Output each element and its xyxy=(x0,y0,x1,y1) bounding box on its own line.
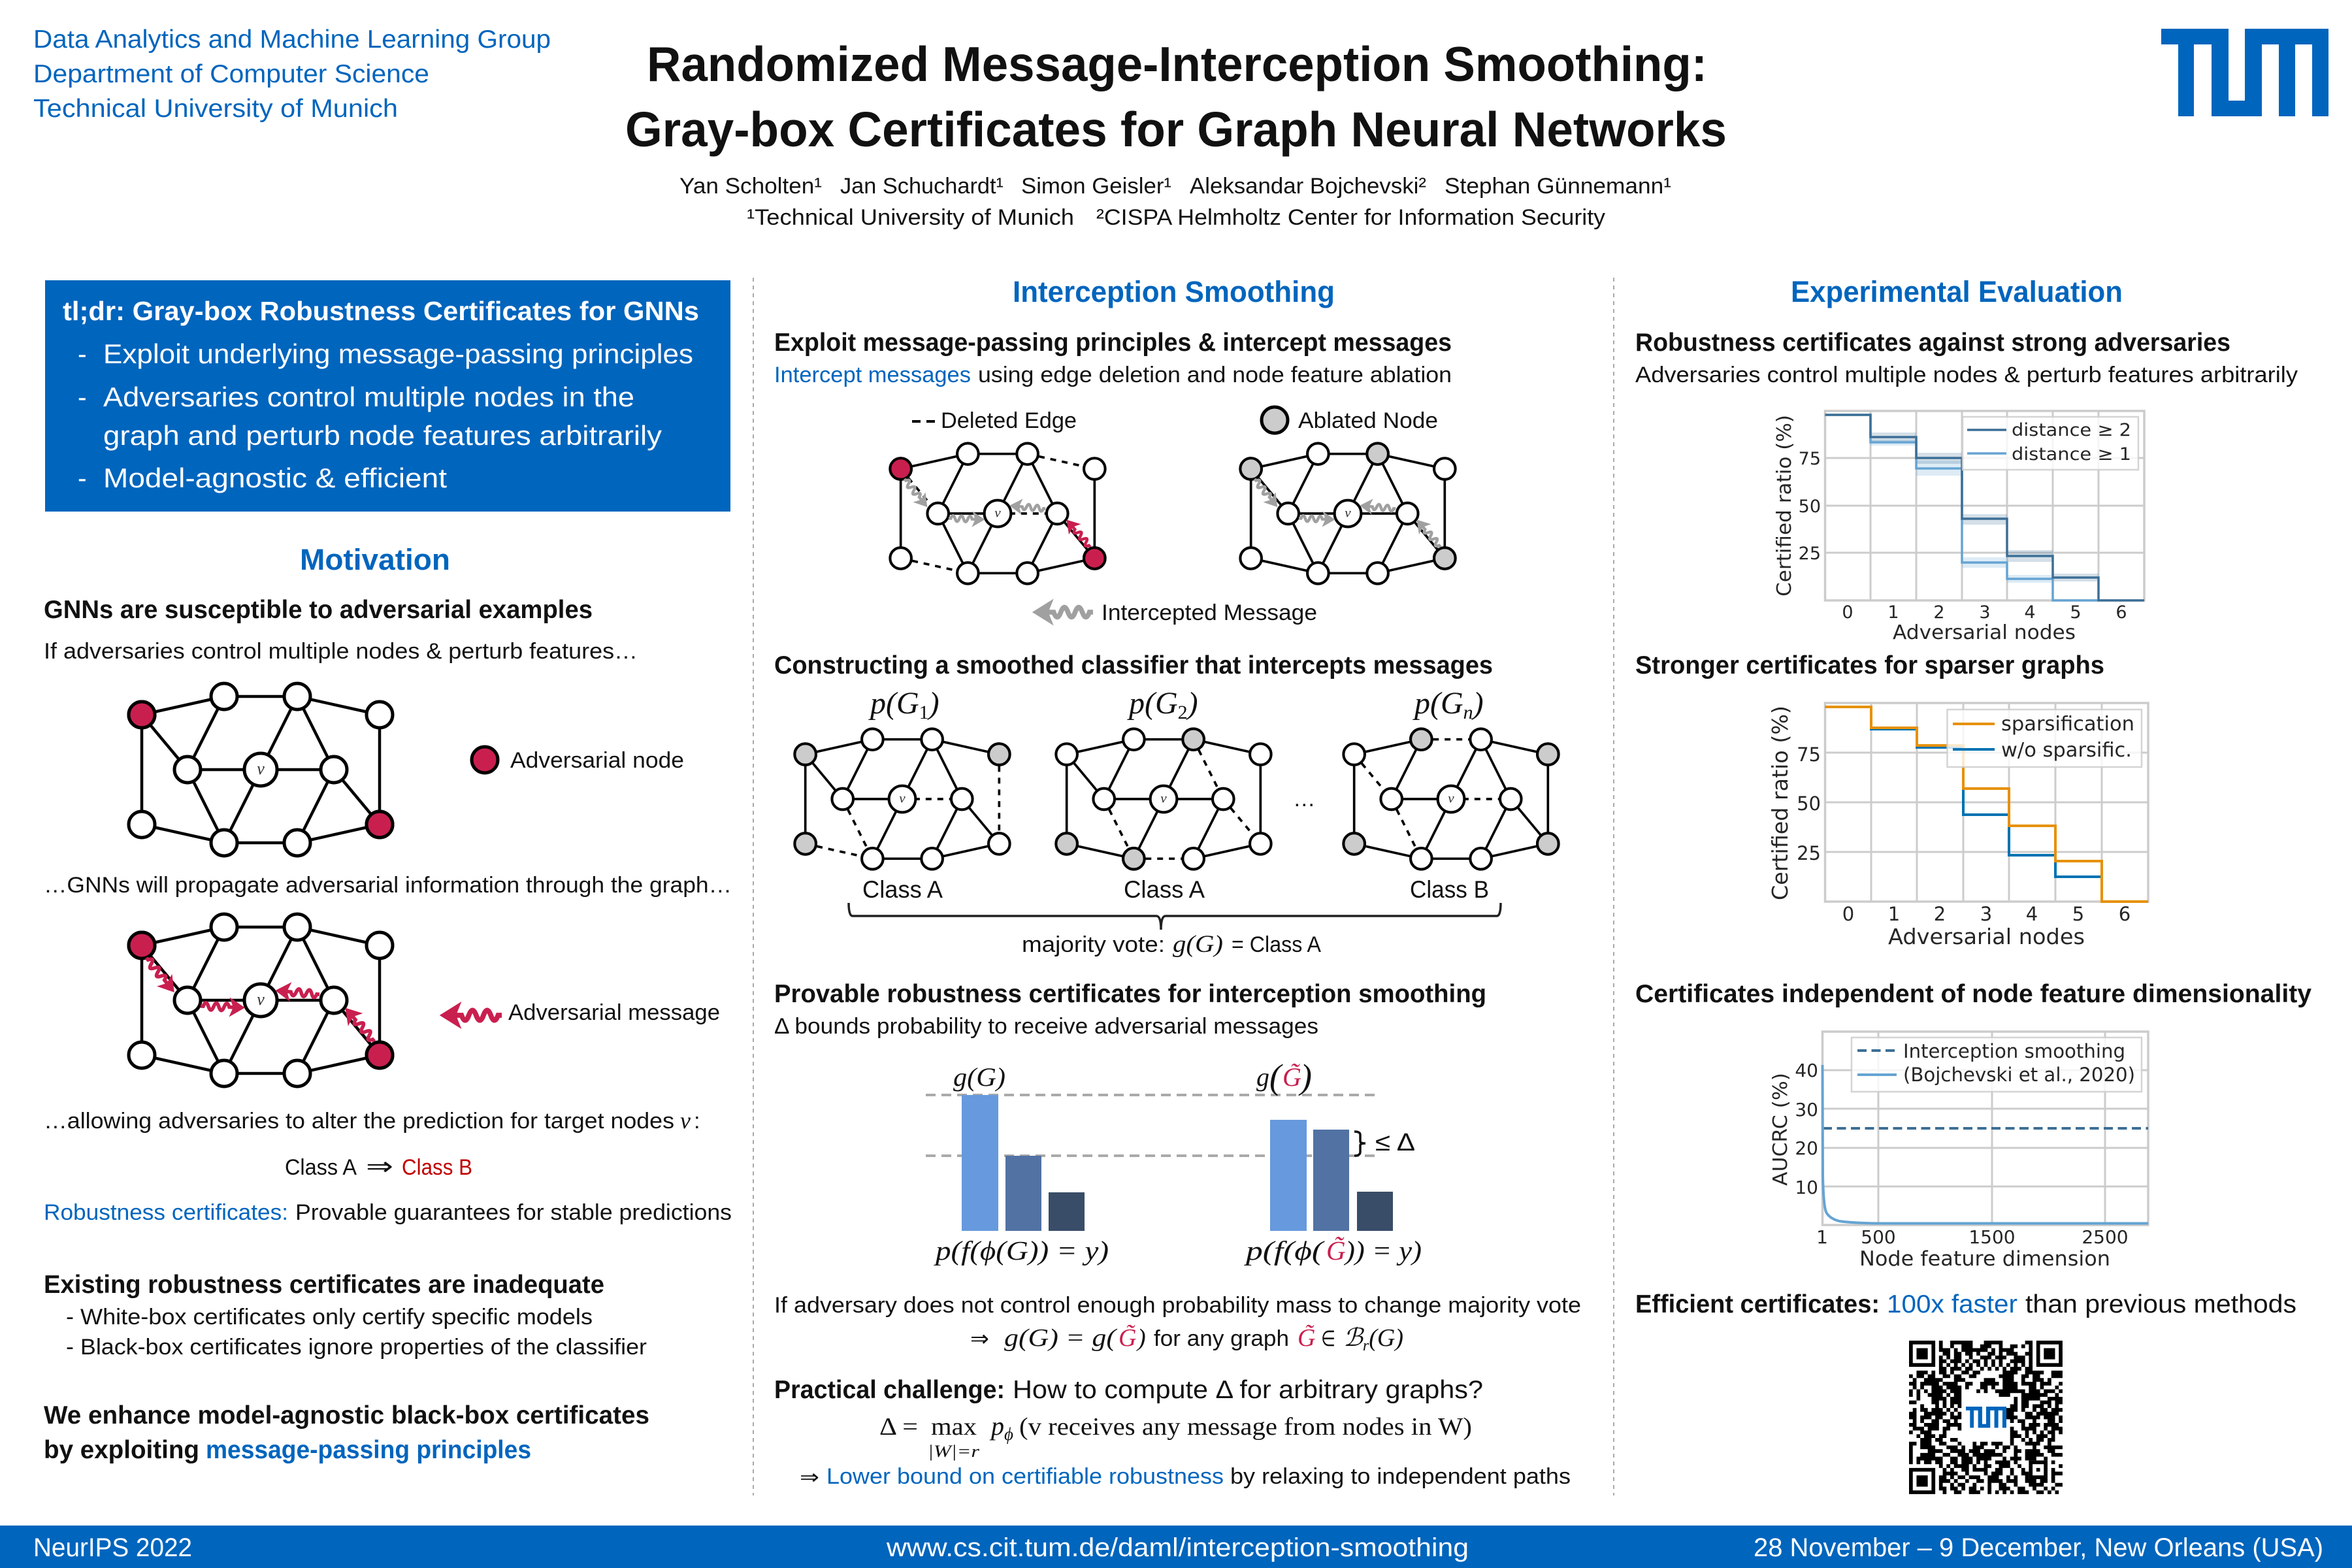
text: efficient certificates: Efficient certificates: xyxy=(1635,1290,1880,1318)
legend: adversarial message xyxy=(440,1000,720,1029)
panel: motivation xyxy=(44,543,732,1464)
chart: AUCRC by feature dimension: 40 xyxy=(1795,1060,1818,1081)
subheading: adversarial examples: GNNs are susceptible to adversarial examples xyxy=(44,596,593,624)
conclusion: enhance black-box certificates: We enhance model-agnostic black-box certificates xyxy=(44,1401,649,1429)
legend: deleted edge: Deleted Edge xyxy=(941,408,1077,433)
chart: class probability bars xyxy=(926,1057,1422,1266)
formula: delta: (v receives any message from nodes in W) xyxy=(1019,1413,1472,1441)
chart: certified ratio by distance: 4 xyxy=(2024,602,2036,623)
text: GNNs propagate: …GNNs will propagate adversarial information through the graph… xyxy=(44,873,732,898)
header: affiliation: Department of Computer Science xyxy=(33,60,429,88)
text: robustness certificates: Robustness certificates: xyxy=(44,1200,288,1225)
chart: certified ratio by distance: distance ≥ 1 xyxy=(2012,444,2131,465)
text: efficient certificates xyxy=(1635,1290,2296,1318)
label: p(Gn): n xyxy=(1463,702,1473,723)
text: alter prediction: v xyxy=(680,1107,691,1134)
formula: invariance: ℬ xyxy=(1343,1324,1363,1352)
heading: motivation: Motivation xyxy=(300,543,450,576)
formula: delta: max xyxy=(931,1413,977,1441)
chart: AUCRC by feature dimension: (Bojchevski et al., 2020) xyxy=(1903,1064,2135,1086)
label: g(G tilde): g xyxy=(1256,1062,1269,1092)
label: p(f(phi(G tilde)))=y: p(f(ϕ( xyxy=(1243,1235,1325,1266)
text: majority vote: = Class A xyxy=(1232,932,1321,957)
graph: adversarial messages: v xyxy=(257,990,265,1009)
ellipsis: … xyxy=(1293,787,1316,811)
authors: Yan Scholten¹ xyxy=(679,174,822,199)
chart: AUCRC by feature dimension: 2500 xyxy=(2082,1226,2129,1248)
header: affiliation xyxy=(33,25,551,123)
chart: certified ratio with sparsification xyxy=(1767,703,2148,949)
panel: tl;dr: tl;dr: Gray-box Robustness Certificates for GNNs xyxy=(63,296,699,326)
label: g(G): g(G) xyxy=(953,1062,1005,1092)
conclusion: enhance black-box certificates xyxy=(44,1401,649,1464)
text: class change: Class A xyxy=(285,1155,357,1180)
panel: tl;dr: graph and perturb node features arbitrarily xyxy=(103,420,662,451)
formula: invariance: ⇒ xyxy=(970,1326,989,1351)
labels: class predictions: Class B xyxy=(1410,876,1489,903)
graph: node ablation: v xyxy=(1345,505,1351,521)
chart: certified ratio with sparsification: 3 xyxy=(1980,903,1992,925)
chart: certified ratio by distance xyxy=(1773,411,2144,644)
formula: invariance: r xyxy=(1363,1337,1369,1354)
text: practical challenge: Practical challenge: xyxy=(774,1376,1005,1404)
label: p(Gn): p(G xyxy=(1414,686,1463,721)
formula: delta: ϕ xyxy=(1004,1424,1013,1444)
chart: certified ratio by distance: 3 xyxy=(1979,602,1991,623)
panel: experimental evaluation xyxy=(1635,275,2311,1494)
label: p(G1): 1 xyxy=(919,702,929,723)
formula: invariance: for any graph xyxy=(1154,1326,1289,1351)
chart: AUCRC by feature dimension: 20 xyxy=(1795,1137,1818,1159)
label: g(G tilde): ) xyxy=(1298,1057,1312,1096)
formula: invariance: G̃ xyxy=(1298,1324,1315,1352)
chart: certified ratio with sparsification: Adversarial nodes xyxy=(1888,924,2085,949)
legend: intercepted message xyxy=(1032,598,1317,626)
list: inadequate certificates: - White-box certificates only certify specific models xyxy=(66,1305,593,1330)
conclusion: enhance black-box certificates: by exploiting xyxy=(44,1436,199,1464)
formula: invariance: g(G) = g( xyxy=(1004,1324,1118,1352)
authors: Stephan Günnemann¹ xyxy=(1445,174,1671,199)
graph: adversarial messages xyxy=(129,914,393,1086)
chart: AUCRC by feature dimension: 1500 xyxy=(1968,1226,2016,1248)
chart: AUCRC by feature dimension: 10 xyxy=(1795,1177,1818,1198)
formula: invariance: ∈ xyxy=(1321,1326,1335,1351)
formula: delta: p xyxy=(991,1411,1004,1441)
chart: AUCRC by feature dimension: Node feature dimension xyxy=(1859,1247,2110,1271)
formula: invariance: G̃ xyxy=(1119,1324,1136,1352)
chart: certified ratio with sparsification: sparsification xyxy=(2001,713,2134,736)
panel: tl;dr: Adversaries control multiple nodes in the xyxy=(103,382,634,412)
legend: ablated node: Ablated Node xyxy=(1298,408,1438,433)
chart: certified ratio with sparsification: 6 xyxy=(2119,903,2131,925)
chart: certified ratio by distance: 1 xyxy=(1887,602,1899,623)
text: intercept messages xyxy=(774,363,1452,387)
graph: sample 1 xyxy=(794,728,1010,870)
panel: tl;dr: - xyxy=(78,382,87,412)
subheading: feature dimensionality: Certificates independent of node feature dimensionality xyxy=(1635,980,2311,1008)
list: inadequate certificates xyxy=(66,1305,647,1360)
graph: edge deletion xyxy=(890,443,1105,584)
graph: edge deletion: v xyxy=(994,505,1001,521)
text: majority vote: g(G) xyxy=(1173,931,1223,958)
formula: delta xyxy=(879,1411,1472,1461)
footer bar xyxy=(0,1526,2352,1568)
text: class change: Class B xyxy=(402,1155,472,1180)
brace: delta xyxy=(1354,1132,1365,1156)
chart: certified ratio by distance: distance ≥ 2 xyxy=(2012,420,2131,440)
subheading: exploit message passing: Exploit message-passing principles & intercept messages xyxy=(774,329,1452,357)
graph: sample n xyxy=(1343,728,1559,870)
list: inadequate certificates: - Black-box certificates ignore properties of the classifier xyxy=(66,1335,647,1360)
chart: AUCRC by feature dimension: 30 xyxy=(1795,1099,1818,1120)
text: probability mass: If adversary does not control enough probability mass to change majority vote xyxy=(774,1293,1581,1318)
chart: certified ratio by distance: 75 xyxy=(1799,449,1821,469)
chart: certified ratio with sparsification: 5 xyxy=(2072,903,2084,925)
graph: adversarial nodes xyxy=(129,683,393,856)
text: lower bound: by relaxing to independent paths xyxy=(1230,1464,1571,1489)
panel: tl;dr: Exploit underlying message-passing principles xyxy=(103,338,693,369)
label: p(f(phi(G tilde)))=y: )) = y) xyxy=(1344,1235,1422,1266)
label: p(G1): p(G xyxy=(870,686,919,721)
subheading: strong adversaries: Robustness certificates against strong adversaries xyxy=(1635,329,2230,357)
chart: certified ratio by distance: 25 xyxy=(1799,544,1821,564)
header: affiliation: Technical University of Munich xyxy=(33,95,398,123)
label: delta bound: ≤ Δ xyxy=(1375,1129,1415,1156)
legend: adversarial message: Adversarial message xyxy=(508,1000,720,1025)
conclusion: enhance black-box certificates: message-passing principles xyxy=(206,1436,531,1464)
chart: certified ratio with sparsification: 1 xyxy=(1888,903,1900,925)
authors xyxy=(679,174,1671,199)
label: p(Gn): ) xyxy=(1471,686,1484,721)
text: robustness certificates xyxy=(44,1200,732,1225)
header: affiliation: Data Analytics and Machine Learning Group xyxy=(33,25,551,54)
chart: certified ratio by distance: 50 xyxy=(1799,497,1821,517)
footer bar: NeurIPS 2022 xyxy=(33,1533,192,1562)
graph: node ablation xyxy=(1240,443,1456,584)
text: majority vote: majority vote: xyxy=(1022,932,1165,957)
chart: certified ratio with sparsification: 0 xyxy=(1842,903,1854,925)
label: g(G tilde): ( xyxy=(1269,1057,1283,1096)
chart: certified ratio by distance: Adversarial nodes xyxy=(1893,621,2076,644)
chart: certified ratio with sparsification: 4 xyxy=(2026,903,2038,925)
text: adversaries control: Adversaries control multiple nodes & perturb features arbitrarily xyxy=(1635,363,2298,387)
footer bar: 28 November – 9 December, New Orleans (USA) xyxy=(1754,1533,2323,1562)
chart: certified ratio with sparsification: 75 xyxy=(1797,743,1821,766)
formula: invariance: ) xyxy=(1136,1324,1146,1352)
label: p(f(phi(G tilde)))=y xyxy=(1243,1235,1422,1266)
heading: experimental evaluation: Experimental Evaluation xyxy=(1791,275,2123,308)
text: practical challenge xyxy=(774,1376,1483,1404)
label: p(G2): 2 xyxy=(1178,702,1188,723)
chart: AUCRC by feature dimension: AUCRC (%) xyxy=(1769,1073,1792,1186)
label: p(G2): ) xyxy=(1186,686,1198,721)
formula: invariance: (G) xyxy=(1369,1324,1403,1352)
footer bar: www.cs.cit.tum.de/daml/interception-smoothing xyxy=(886,1533,1469,1562)
text: lower bound xyxy=(800,1464,1571,1489)
panel: tl;dr: Model-agnostic & efficient xyxy=(103,463,448,493)
QR code xyxy=(1909,1341,2063,1494)
text: efficient certificates: 100x faster xyxy=(1887,1290,2017,1318)
authors: Simon Geisler¹ xyxy=(1021,174,1171,199)
text: majority vote xyxy=(1022,931,1321,958)
text: alter prediction: …allowing adversaries to alter the prediction for target nodes xyxy=(44,1109,674,1134)
chart: AUCRC by feature dimension: Interception smoothing xyxy=(1903,1040,2125,1062)
brace: majority vote xyxy=(849,903,1501,930)
labels: class predictions: Class A xyxy=(862,876,943,903)
title xyxy=(625,37,1727,157)
title: Gray-box Certificates for Graph Neural Networks xyxy=(625,102,1727,157)
label: p(f(phi(G tilde)))=y: G̃ xyxy=(1326,1235,1346,1266)
subheading: smoothed classifier: Constructing a smoothed classifier that intercepts messages xyxy=(774,651,1493,679)
chart: certified ratio by distance: 0 xyxy=(1842,602,1854,623)
text: lower bound: Lower bound on certifiable robustness xyxy=(826,1464,1224,1489)
text: class change: ⇒ xyxy=(366,1152,393,1181)
author affiliations: ²CISPA Helmholtz Center for Information Security xyxy=(1096,205,1606,230)
formula: invariance xyxy=(970,1324,1403,1354)
panel: tl;dr: - xyxy=(78,463,87,493)
authors: Aleksandar Bojchevski² xyxy=(1190,174,1426,199)
panel: interception smoothing xyxy=(774,275,1581,1489)
labels: class predictions xyxy=(862,876,1489,903)
text: efficient certificates: than previous methods xyxy=(2025,1290,2296,1318)
chart: certified ratio with sparsification: 2 xyxy=(1934,903,1946,925)
chart: certified ratio by distance: 6 xyxy=(2115,602,2127,623)
chart: certified ratio by distance: 5 xyxy=(2070,602,2082,623)
graph: adversarial nodes: v xyxy=(257,759,265,778)
chart: certified ratio with sparsification: Certified ratio (%) xyxy=(1767,706,1793,900)
label: p(G2): p(G xyxy=(1129,686,1178,721)
text: intercept messages: using edge deletion and node feature ablation xyxy=(978,363,1452,387)
text: robustness certificates: Provable guarantees for stable predictions xyxy=(295,1200,732,1225)
chart: certified ratio by distance: Certified ratio (%) xyxy=(1773,415,1796,596)
chart: certified ratio with sparsification: w/o sparsific. xyxy=(2001,739,2132,762)
author affiliations: ¹Technical University of Munich xyxy=(747,205,1074,230)
chart: certified ratio with sparsification: 25 xyxy=(1797,842,1821,864)
label: p(f(phi(G)))=y: p(f(ϕ(G)) = y) xyxy=(934,1235,1109,1266)
graph: sample n: v xyxy=(1448,791,1454,806)
text: lower bound: ⇒ xyxy=(800,1466,819,1489)
formula: delta: Δ = xyxy=(879,1413,918,1441)
panel: tl;dr xyxy=(45,280,730,512)
TUM logo xyxy=(2161,29,2328,116)
legend: intercepted message: Intercepted Message xyxy=(1102,600,1317,625)
title: Randomized Message-Interception Smoothing: xyxy=(647,37,1707,91)
label: p(G1): ) xyxy=(927,686,939,721)
label: g(G tilde) xyxy=(1256,1057,1312,1096)
chart: certified ratio by distance: 2 xyxy=(1933,602,1945,623)
label: g(G tilde): G̃ xyxy=(1282,1062,1301,1092)
graph: sample 2: v xyxy=(1160,791,1167,806)
chart: AUCRC by feature dimension: 500 xyxy=(1861,1226,1896,1248)
panel: tl;dr: - xyxy=(78,339,87,369)
legend: adversarial node: Adversarial node xyxy=(510,748,684,773)
subheading: sparser graphs: Stronger certificates for sparser graphs xyxy=(1635,651,2104,679)
subheading: existing certificates: Existing robustness certificates are inadequate xyxy=(44,1271,604,1299)
heading: interception smoothing: Interception Smoothing xyxy=(1013,275,1335,308)
text: adversaries control: If adversaries control multiple nodes & perturb features… xyxy=(44,639,638,664)
labels: class predictions: Class A xyxy=(1124,876,1205,903)
text: intercept messages: Intercept messages xyxy=(774,363,971,387)
graph: sample 1: v xyxy=(899,791,906,806)
author affiliations xyxy=(747,205,1606,230)
text: practical challenge: How to compute Δ for arbitrary graphs? xyxy=(1013,1376,1483,1404)
authors: Jan Schuchardt¹ xyxy=(840,174,1004,199)
chart: certified ratio with sparsification: 50 xyxy=(1797,792,1821,815)
subheading: provable certificates: Provable robustness certificates for interception smoothing xyxy=(774,980,1486,1008)
text: delta bounds: Δ bounds probability to receive adversarial messages xyxy=(774,1014,1318,1039)
formula: delta: |W|=r xyxy=(928,1442,980,1461)
graph: sample 2 xyxy=(1056,728,1271,870)
chart: AUCRC by feature dimension xyxy=(1769,1032,2148,1271)
text: alter prediction: : xyxy=(694,1109,700,1134)
text: class change xyxy=(285,1152,472,1181)
chart: AUCRC by feature dimension: 1 xyxy=(1816,1226,1828,1248)
